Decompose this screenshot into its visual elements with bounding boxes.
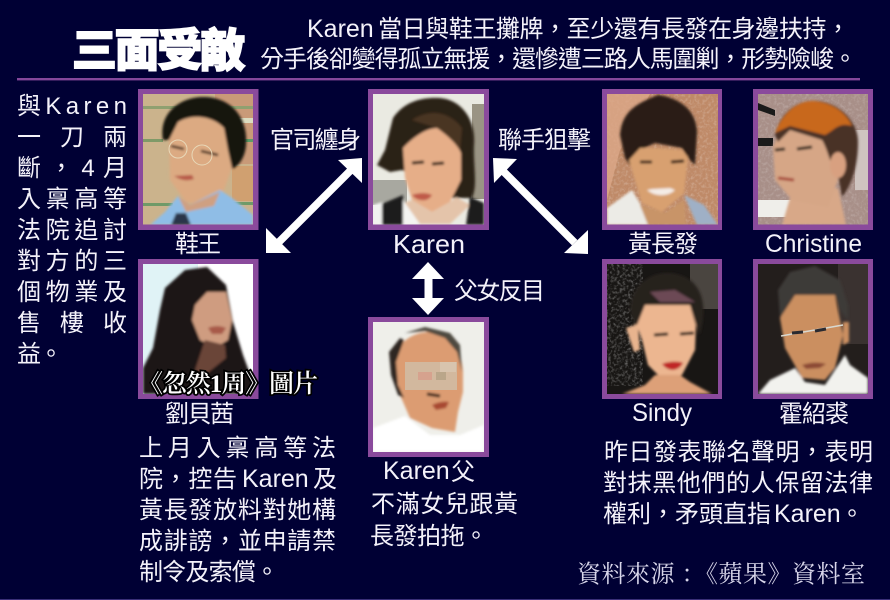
photo: 劉貝茜 <box>138 259 258 399</box>
left text block: 個物業及 <box>17 279 127 306</box>
left text block: 一刀兩 <box>17 124 127 151</box>
header rule <box>17 78 860 80</box>
title: 三面受敵 <box>72 25 245 76</box>
name: Christine: Christine <box>765 230 862 258</box>
source credit: 資料來源 ：《蘋果》資料室 <box>577 561 865 588</box>
name: 黃長發: 黃長發 <box>628 231 698 258</box>
photo: 霍紹裘 <box>753 259 873 399</box>
text block: Karen父: 長發拍拖。 <box>370 523 488 550</box>
left text block: 益。 <box>17 341 63 368</box>
text block: joint statement: 權利，矛頭直指 <box>603 501 771 528</box>
name: 劉貝茜: 劉貝茜 <box>165 401 234 428</box>
text block: 劉貝茜: 及 <box>313 466 337 493</box>
left text block <box>17 93 127 368</box>
text block: 劉貝茜 <box>139 435 337 586</box>
photo: Karen <box>368 89 489 230</box>
text block: 劉貝茜: 成誹謗，並申請禁 <box>139 528 336 555</box>
text block: joint statement: 。 <box>840 501 864 528</box>
arrow: Karen to 黃長發 <box>493 158 588 254</box>
text block: 劉貝茜: 黃長發放料對她構 <box>139 497 336 524</box>
text block: 劉貝茜: 上月入稟高等法 <box>139 435 336 462</box>
arrow: Karen to father <box>412 262 444 315</box>
text block: Karen父: 不滿女兒跟黃 <box>371 491 518 518</box>
left text block: 法院追討 <box>17 217 127 244</box>
text block: joint statement <box>603 439 873 528</box>
photo: Karen父 <box>368 317 489 457</box>
label: 聯手狙擊: 聯手狙擊 <box>498 127 591 154</box>
label: 官司纏身: 官司纏身 <box>270 127 361 154</box>
name: 霍紹裘: 霍紹裘 <box>779 401 849 428</box>
intro text: 當日與鞋王攤牌，至少還有長發在身邊扶持， <box>378 16 850 43</box>
left text block: 與Karen <box>17 93 127 120</box>
intro text: 分手後卻變得孤立無援，還慘遭三路人馬圍剿，形勢險峻。 <box>260 46 857 73</box>
left text block: 斷，4月 <box>17 155 127 182</box>
text block: 劉貝茜: 院，控告 <box>139 466 237 493</box>
photo: Sindy <box>602 259 722 399</box>
name: Sindy: Sindy <box>632 399 692 427</box>
caption: photo credit: 《忽然1周》圖片 <box>138 370 318 398</box>
name: 鞋王: 鞋王 <box>175 231 221 258</box>
photo: Christine <box>753 89 873 230</box>
text block: Karen父 <box>370 491 518 550</box>
intro text: Karen <box>307 15 374 43</box>
text block: joint statement: 昨日發表聯名聲明，表明 <box>604 439 873 466</box>
photo: 鞋王 <box>138 89 258 230</box>
name: Karen父: Karen <box>383 457 450 485</box>
text block: 劉貝茜: 制令及索償。 <box>139 559 279 586</box>
intro text <box>260 15 857 73</box>
arrow: 鞋王 to Karen <box>266 158 362 253</box>
left text block: 對方的三 <box>17 248 127 275</box>
text block: joint statement: 對抹黑他們的人保留法律 <box>603 470 873 497</box>
name: Karen: Karen <box>393 229 465 259</box>
text block: 劉貝茜: Karen <box>242 465 309 493</box>
left text block: 入稟高等 <box>17 186 127 213</box>
left text block: 售樓收 <box>17 310 127 337</box>
name: Karen父: 父 <box>451 459 475 486</box>
text block: joint statement: Karen <box>774 500 841 528</box>
label: 父女反目: 父女反目 <box>454 278 545 305</box>
photo: 黃長發 <box>602 89 722 230</box>
